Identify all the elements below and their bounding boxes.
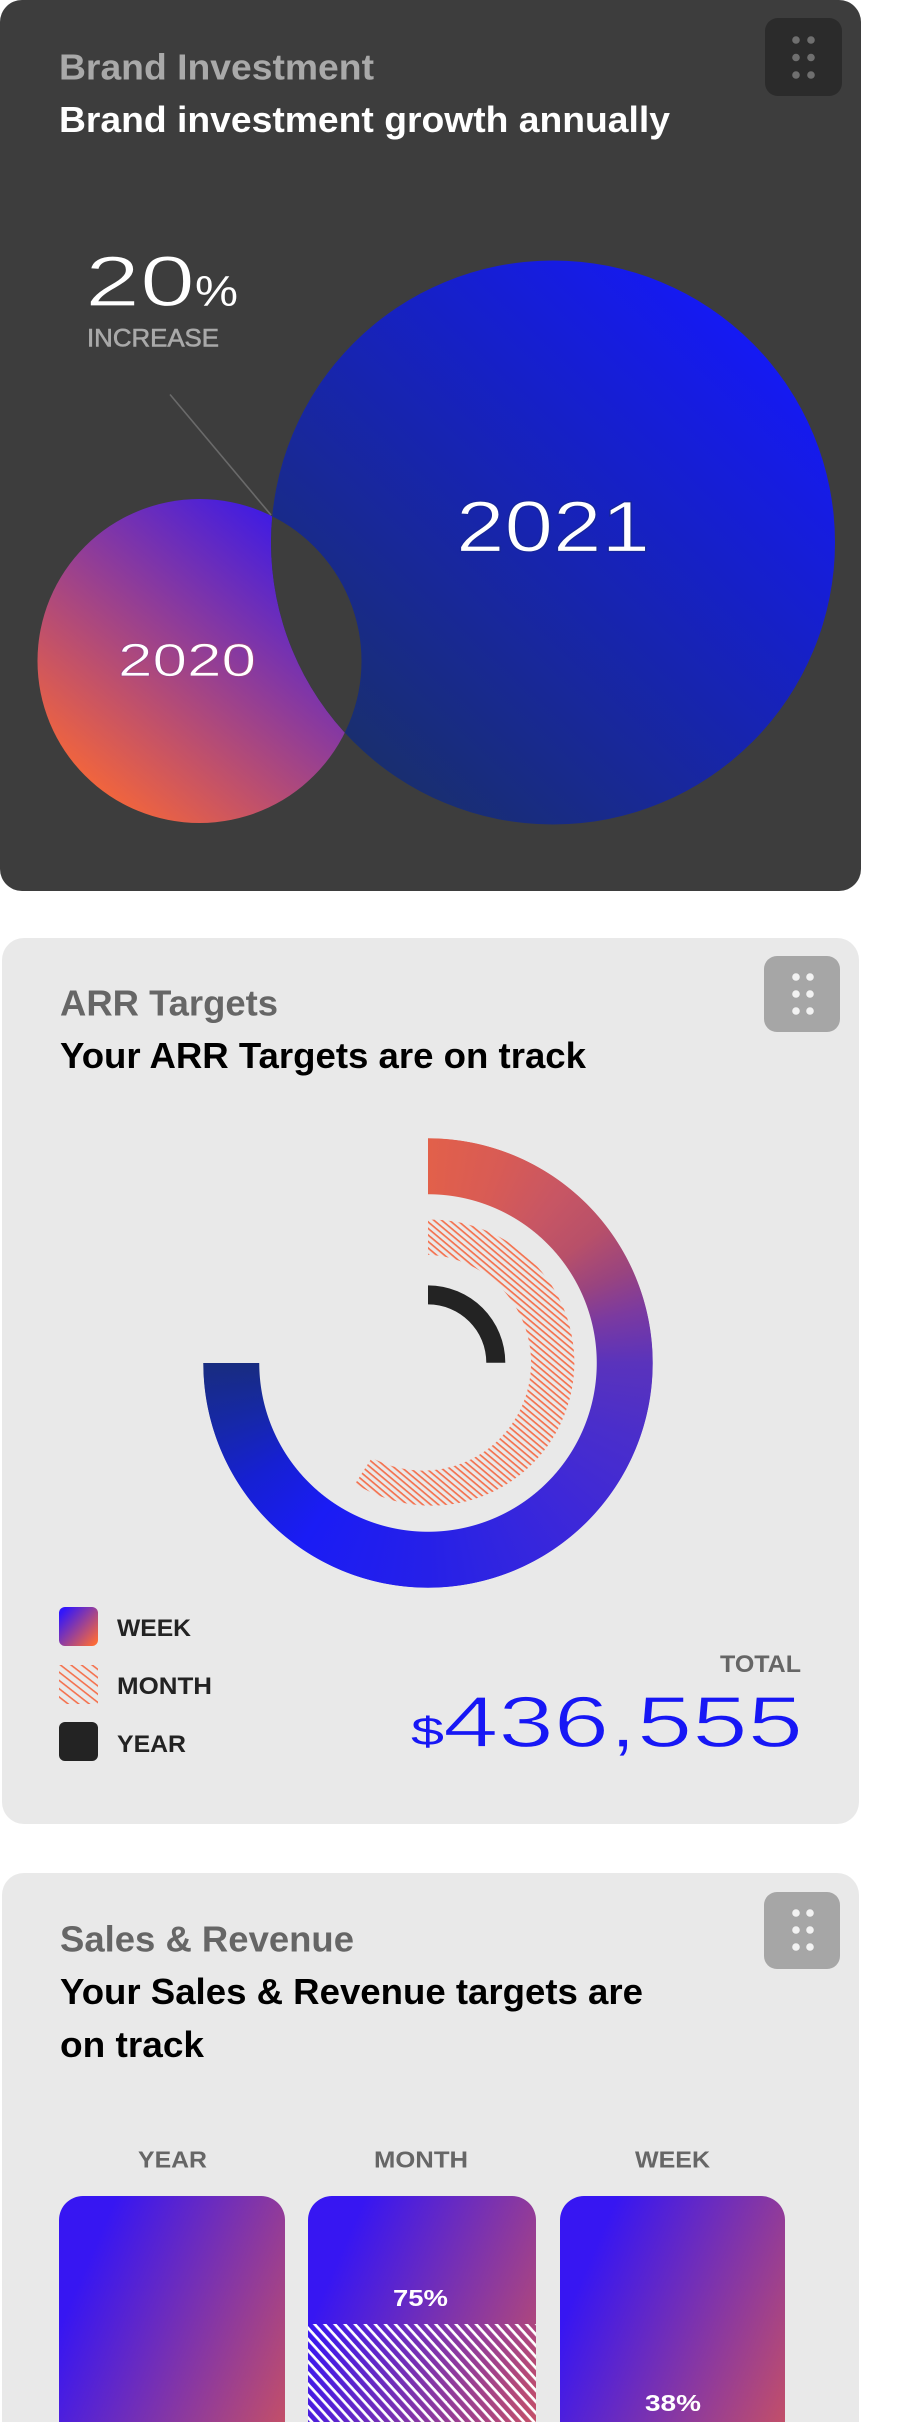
panel: sales and revenue bbox=[2, 1873, 859, 2422]
circle: 2021 bbox=[271, 260, 835, 824]
icon: menu button bbox=[765, 18, 842, 96]
subheading: sales targets: on track bbox=[60, 2024, 205, 2065]
callout: 20% increase bbox=[85, 243, 238, 352]
ring: month bbox=[355, 1220, 574, 1506]
total value bbox=[411, 1651, 803, 1763]
bar chart bbox=[59, 2146, 785, 2422]
icon: menu button bbox=[764, 1892, 840, 1969]
callout: 20% increase: % bbox=[195, 268, 238, 316]
callout: 20% increase: INCREASE bbox=[87, 324, 219, 352]
callout: 20% increase: 20 bbox=[85, 243, 195, 322]
subheading: sales targets: Your Sales & Revenue targets are bbox=[60, 1971, 643, 2012]
bar: month: MONTH bbox=[374, 2146, 468, 2172]
subheading: sales targets bbox=[60, 1971, 643, 2065]
heading: sales and revenue: Sales & Revenue bbox=[60, 1918, 354, 1960]
circle overlap bbox=[271, 516, 362, 732]
heading: ARR targets: ARR Targets bbox=[60, 982, 278, 1024]
legend item: week: WEEK bbox=[117, 1615, 192, 1642]
bar: month: 75% bbox=[393, 2285, 448, 2311]
bar: week: 38% bbox=[645, 2390, 701, 2416]
bar: year bbox=[59, 2146, 285, 2422]
total value: $ bbox=[411, 1710, 444, 1754]
panel: brand investment bbox=[0, 0, 861, 891]
callout leader line bbox=[170, 394, 271, 515]
legend item: week bbox=[59, 1607, 192, 1646]
legend item: month: MONTH bbox=[117, 1673, 212, 1700]
legend item: year: YEAR bbox=[117, 1731, 186, 1758]
legend item: year bbox=[59, 1722, 186, 1761]
subheading: ARR on track: Your ARR Targets are on track bbox=[60, 1035, 587, 1076]
heading: brand investment: Brand Investment bbox=[59, 46, 374, 88]
bar: year: YEAR bbox=[138, 2146, 207, 2172]
ring: year bbox=[428, 1285, 505, 1363]
subheading: brand investment growth: Brand investment growth annually bbox=[59, 99, 670, 140]
icon: menu button bbox=[764, 956, 840, 1032]
total value: TOTAL bbox=[720, 1651, 801, 1678]
chart: overlapping circles bbox=[38, 260, 835, 824]
circle: 2020 bbox=[38, 499, 362, 823]
legend bbox=[59, 1607, 212, 1761]
legend item: month bbox=[59, 1665, 212, 1704]
bar: month bbox=[308, 2146, 536, 2422]
label: 2021: 2021 bbox=[456, 488, 650, 568]
ring: week bbox=[203, 1138, 653, 1588]
label: 2020: 2020 bbox=[118, 634, 256, 686]
bar: week bbox=[560, 2146, 785, 2422]
chart: radial progress rings bbox=[203, 1138, 653, 1588]
panel: ARR targets bbox=[2, 938, 859, 1824]
total value: 436,555 bbox=[443, 1683, 803, 1763]
bar: week: WEEK bbox=[635, 2146, 710, 2172]
